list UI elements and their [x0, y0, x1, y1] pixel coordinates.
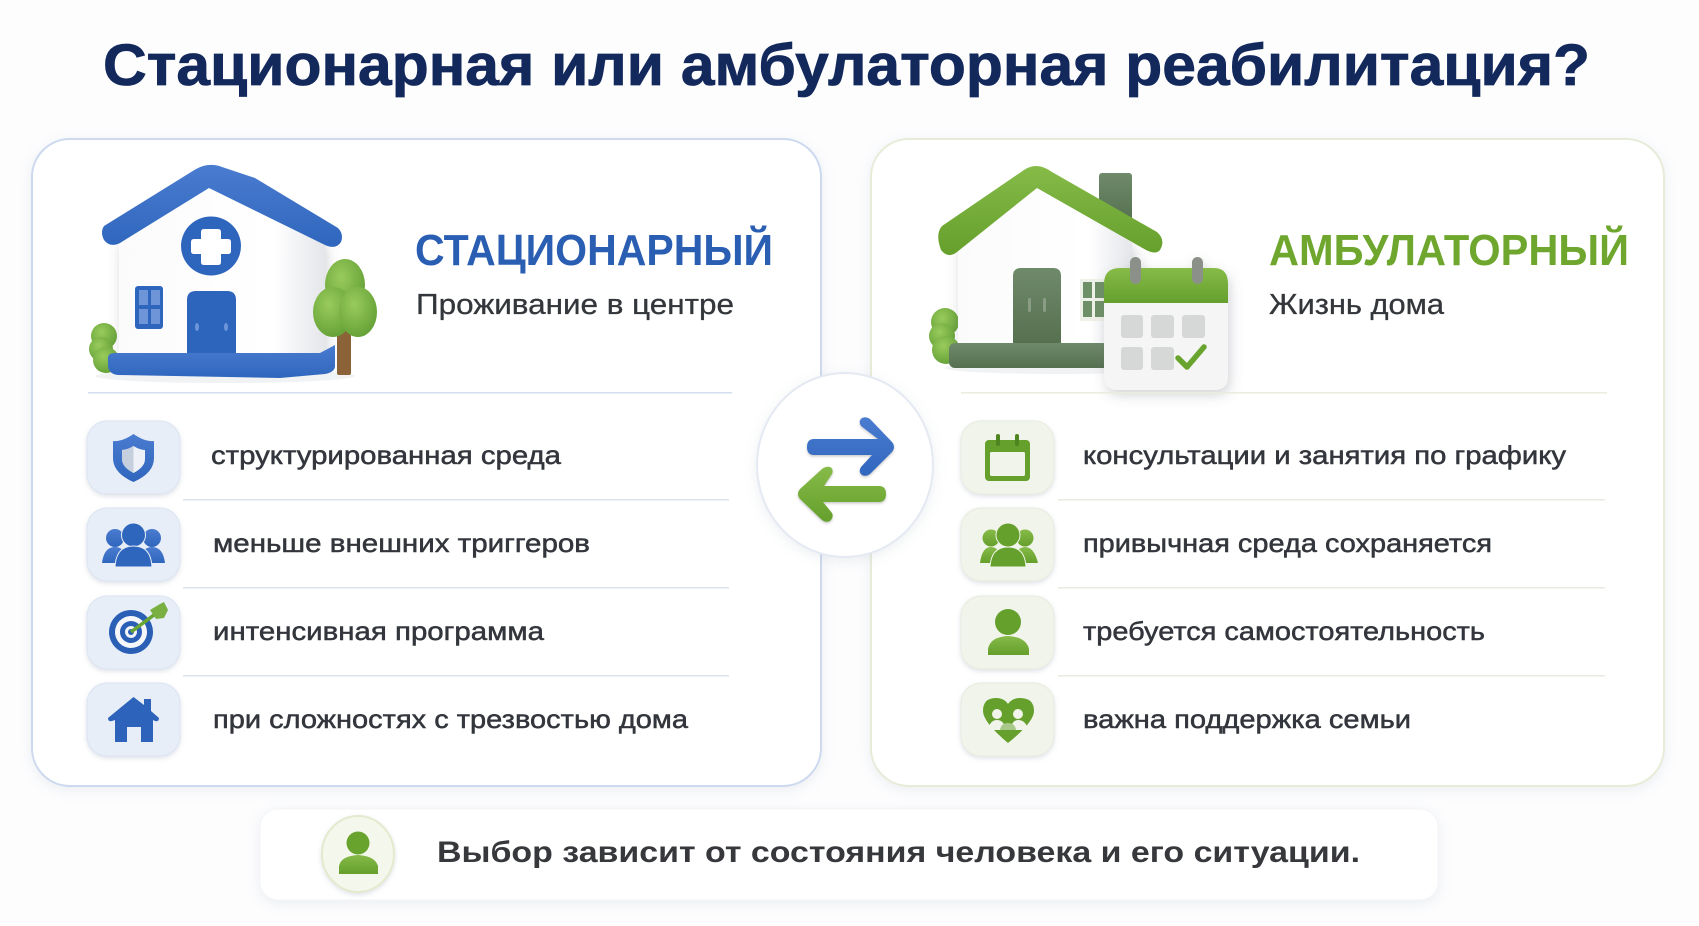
icon: person in circle: [322, 816, 394, 892]
window: [135, 286, 163, 329]
icon: person: [961, 596, 1054, 669]
chimney: [1099, 173, 1132, 223]
item: structured environment: [87, 421, 562, 494]
window: [1080, 279, 1106, 321]
exchange circle with arrows: [757, 373, 933, 557]
item: scheduled consultations: консультации и занятия по графику: [1083, 440, 1566, 470]
icon: shield: [87, 421, 180, 494]
subheading: inpatient: Проживание в центре: [416, 289, 734, 321]
door: [1013, 268, 1061, 345]
base: [108, 345, 335, 378]
walls: [119, 178, 325, 355]
item: family support: [961, 683, 1411, 756]
icon: home: [87, 683, 180, 756]
item: intensive program: [87, 596, 545, 669]
item: sobriety difficulties at home: [87, 683, 689, 756]
illustration: clinic house: [89, 165, 377, 383]
item: structured environment: структурированная среда: [211, 440, 562, 470]
item: independence required: требуется самостоятельность: [1083, 616, 1485, 646]
bush: [89, 323, 119, 373]
ground shadow: [95, 369, 355, 383]
item: fewer external triggers: меньше внешних триггеров: [213, 528, 590, 558]
medical cross emblem: [181, 216, 241, 276]
item: independence required: [961, 596, 1485, 669]
arrow: green left: [798, 467, 886, 522]
icon: group of people: [961, 508, 1054, 581]
icon: group of people: [87, 508, 180, 581]
roof: [938, 166, 1162, 255]
subheading: outpatient: Жизнь дома: [1269, 289, 1445, 321]
icon: heart with family: [961, 683, 1054, 756]
arrow: blue right: [807, 417, 894, 476]
ground shadow: [945, 362, 1175, 374]
calendar: [1104, 257, 1228, 390]
icon: target with arrow: [87, 596, 180, 669]
item: family support: важна поддержка семьи: [1083, 704, 1411, 734]
item: sobriety difficulties at home: при сложностях с трезвостью дома: [213, 704, 689, 734]
item: fewer external triggers: [87, 508, 590, 581]
panel: inpatient: [32, 139, 821, 786]
roof: [102, 165, 342, 247]
callout: choice depends on the situation: [260, 809, 1438, 900]
item: familiar environment: привычная среда сохраняется: [1083, 528, 1492, 558]
item: scheduled consultations: [961, 421, 1566, 494]
walls: [958, 185, 1132, 345]
panel: outpatient: [871, 139, 1664, 786]
door: [187, 291, 236, 355]
bush: [929, 308, 960, 364]
title: Стационарная или амбулаторная реабилитация?: [103, 33, 1590, 98]
heading: outpatient: АМБУЛАТОРНЫЙ: [1269, 224, 1629, 275]
heading: inpatient: СТАЦИОНАРНЫЙ: [415, 224, 773, 275]
tree: [313, 259, 377, 375]
illustration: house with calendar: [929, 166, 1228, 390]
callout text: Выбор зависит от состояния человека и его ситуации.: [437, 836, 1360, 869]
item: intensive program: интенсивная программа: [213, 616, 545, 646]
icon: calendar: [961, 421, 1054, 494]
item: familiar environment: [961, 508, 1492, 581]
base: [949, 343, 1109, 368]
